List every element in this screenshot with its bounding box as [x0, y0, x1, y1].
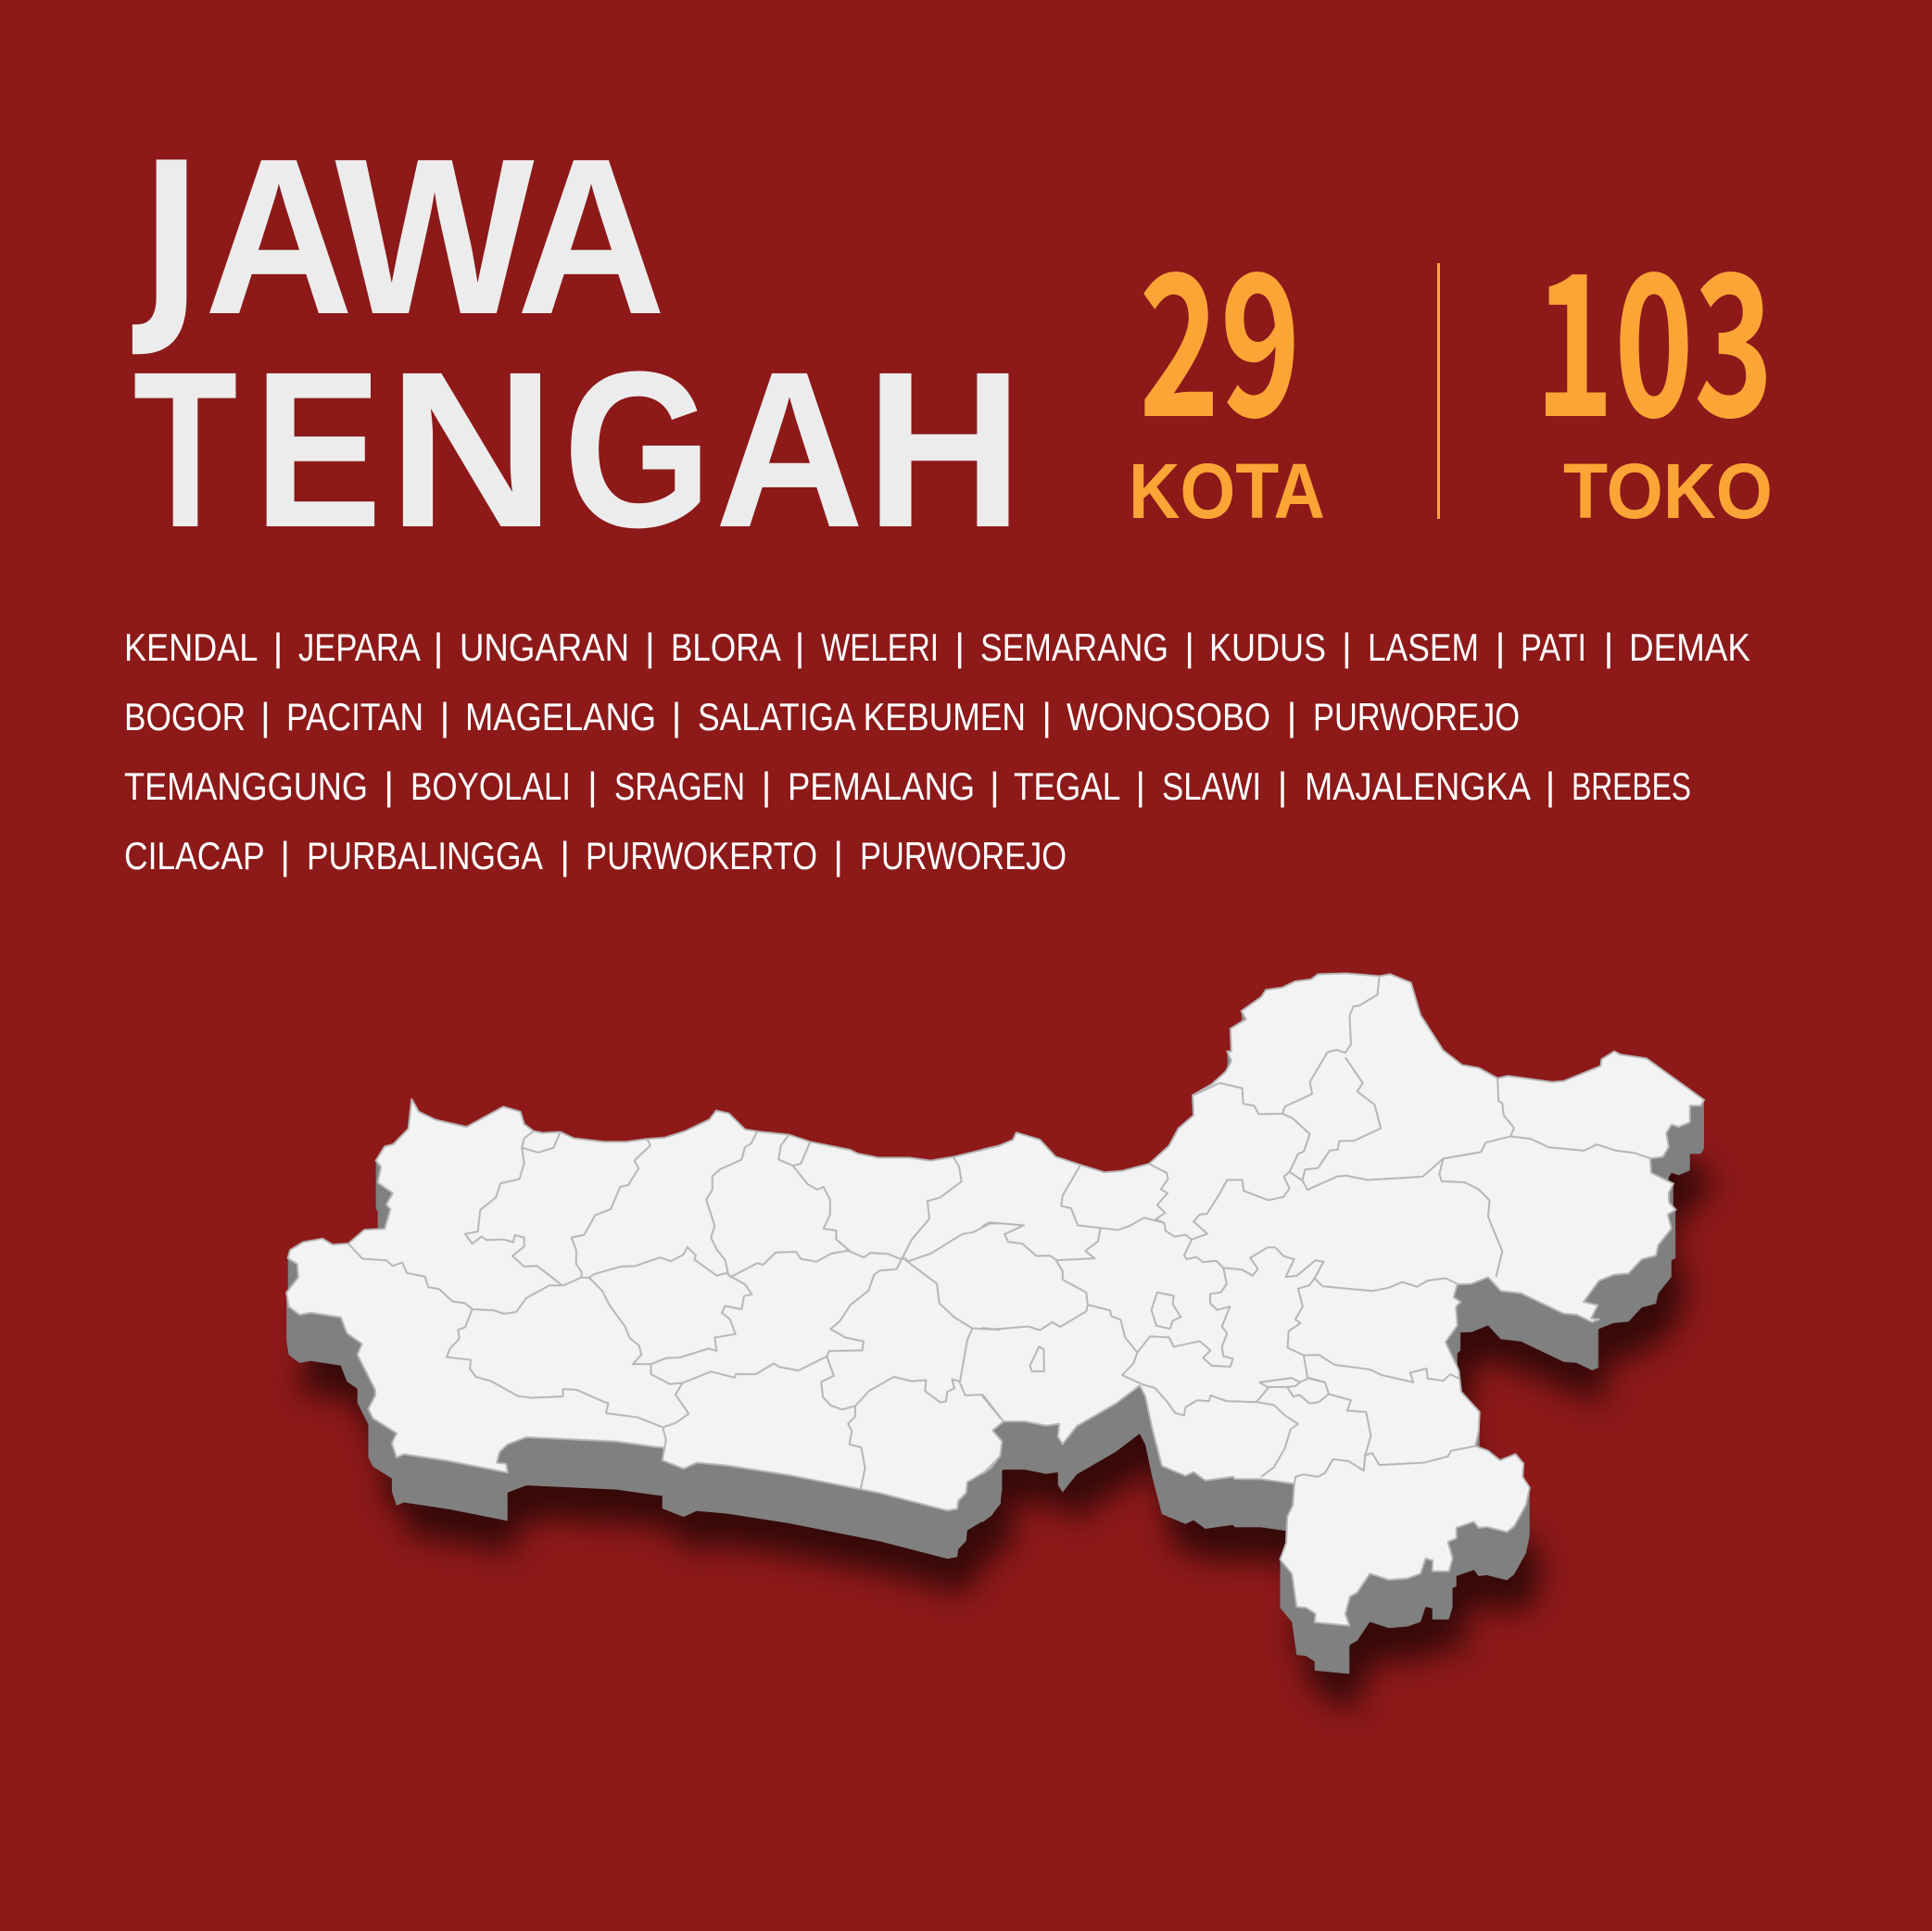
city list line 2: WONOSOBO	[1067, 695, 1270, 738]
city list line 4: CILACAP	[124, 834, 264, 877]
city list line 1: |	[273, 625, 283, 669]
city list line 1: |	[434, 625, 443, 669]
title: JAWA TENGAH: N	[387, 325, 555, 574]
title: JAWA TENGAH: H	[865, 325, 1023, 574]
city list line 4: |	[280, 834, 290, 877]
city list line 4: |	[833, 834, 843, 877]
map: Central Java 3D map	[286, 973, 1704, 1625]
city list line 1: |	[1604, 625, 1613, 669]
city list line 3: |	[384, 764, 394, 808]
city list line 1: KENDAL	[124, 625, 257, 669]
city list line 4: PURWOKERTO	[586, 834, 817, 877]
city list line 2: |	[672, 695, 681, 738]
title: JAWA TENGAH: G	[563, 325, 712, 574]
city list line 4: PURWOREJO	[860, 834, 1067, 877]
city list line 2: |	[1042, 695, 1052, 738]
city list line 3: |	[1278, 764, 1287, 808]
city list line 1: |	[954, 625, 965, 669]
city list line 3: PEMALANG	[788, 764, 975, 808]
city list line 1: |	[1342, 625, 1352, 669]
city list line 1: |	[1496, 625, 1505, 669]
city list line 3: |	[990, 764, 1000, 808]
title: JAWA TENGAH: W	[335, 112, 535, 360]
map top surface with extruded wall and drop shadow	[286, 973, 1704, 1625]
title: JAWA TENGAH: A	[714, 325, 865, 574]
city list line 1: WELERI	[821, 625, 939, 669]
title: JAWA TENGAH: J	[142, 119, 201, 362]
city list line 2: |	[260, 695, 271, 738]
city list line 3: SRAGEN	[614, 764, 745, 808]
city list line 3: TEGAL	[1014, 764, 1119, 808]
city list line 1: |	[1184, 625, 1194, 669]
city list line 3: |	[1546, 764, 1555, 808]
city list line 2: |	[440, 695, 449, 738]
title: JAWA TENGAH: E	[254, 325, 382, 574]
title: JAWA TENGAH: A	[204, 112, 354, 360]
district borders, east	[982, 973, 1704, 1625]
city list line 2: |	[1287, 695, 1296, 738]
city list line 4: PURBALINGGA	[307, 834, 543, 877]
city list line 3: TEMANGGUNG	[124, 764, 368, 808]
city list	[124, 625, 1750, 877]
city list line 2: SALATIGA KEBUMEN	[698, 695, 1026, 738]
title: JAWA TENGAH: A	[516, 112, 666, 360]
city list line 1: PATI	[1521, 625, 1586, 669]
city list line 2: MAGELANG	[465, 695, 656, 738]
stat: 29: 29	[1139, 189, 1301, 473]
city list line 1: DEMAK	[1629, 625, 1750, 669]
city list line 1: |	[645, 625, 655, 669]
city list line 1: SEMARANG	[980, 625, 1168, 669]
city list line 3: |	[762, 764, 771, 808]
city list line 3: |	[1135, 764, 1145, 808]
stat label: TOKO: TOKO	[1563, 448, 1773, 535]
stat: 103: 103	[1534, 189, 1774, 473]
city list line 3: |	[587, 764, 598, 808]
city list line 1: UNGARAN	[460, 625, 629, 669]
city list line 2: PURWOREJO	[1313, 695, 1520, 738]
city list line 2: BOGOR	[124, 695, 246, 738]
city list line 2: PACITAN	[286, 695, 423, 738]
title: JAWA TENGAH	[132, 112, 1023, 574]
city list line 1: JEPARA	[298, 625, 421, 669]
city list line 3: SLAWI	[1162, 764, 1261, 808]
city list line 1: BLORA	[671, 625, 781, 669]
city list line 1: |	[795, 625, 804, 669]
title: JAWA TENGAH: T	[133, 325, 237, 574]
city list line 4: |	[560, 834, 570, 877]
city list line 3: BREBES	[1572, 764, 1691, 808]
city list line 3: MAJALENGKA	[1305, 764, 1531, 808]
city list line 1: KUDUS	[1209, 625, 1326, 669]
city list line 3: BOYOLALI	[410, 764, 571, 808]
district borders, west	[286, 1099, 1001, 1510]
divider	[1437, 263, 1440, 519]
stat label: KOTA: KOTA	[1129, 448, 1325, 535]
city list line 1: LASEM	[1368, 625, 1479, 669]
